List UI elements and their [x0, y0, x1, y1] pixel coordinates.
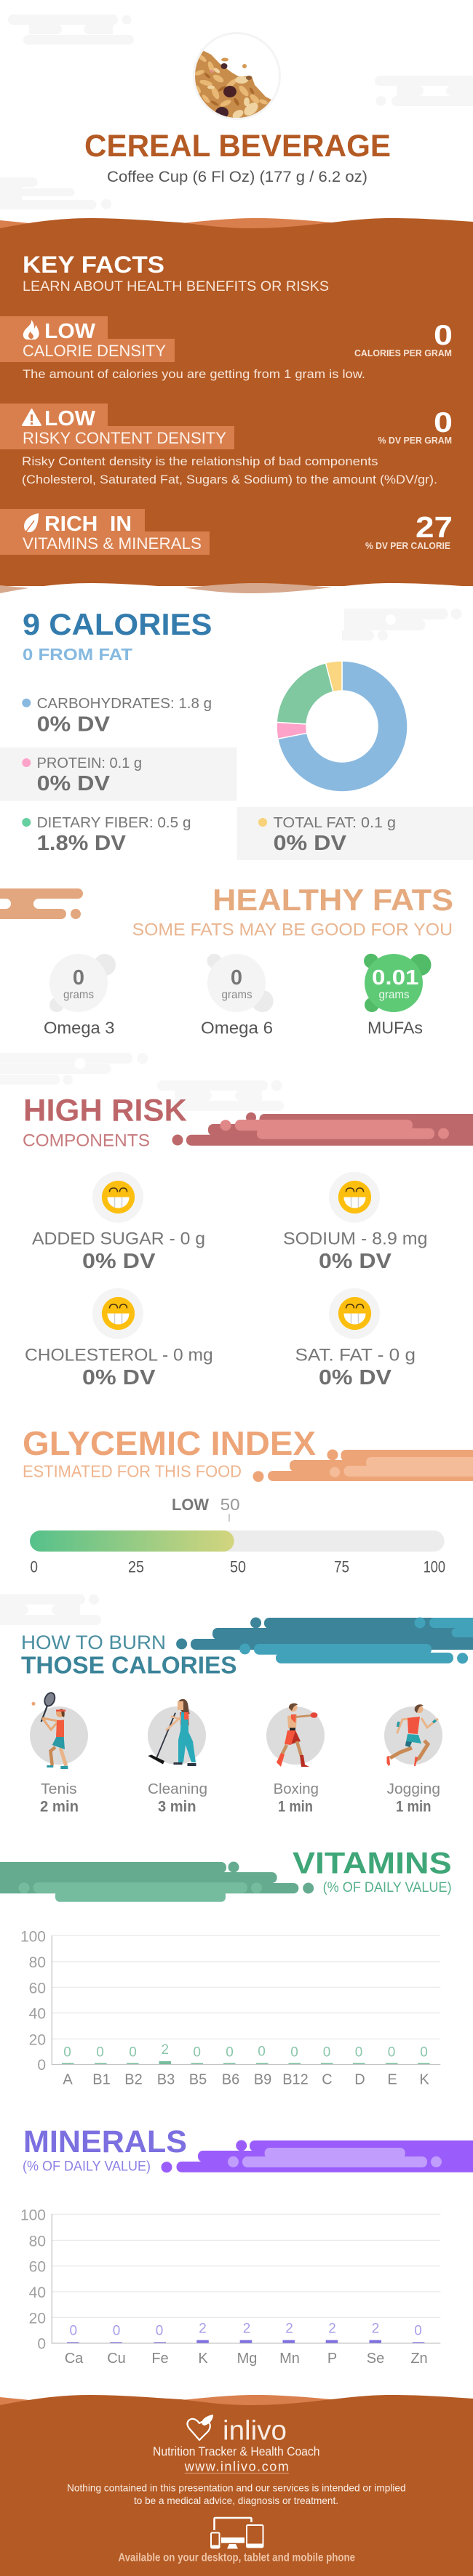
panel: minerals: [20, 2124, 473, 2367]
bar chart: minerals: Zn: [410, 2351, 428, 2367]
icon: runner: [387, 1704, 438, 1766]
metric: omega 3: [44, 954, 116, 1038]
gauge label: 50: [220, 1496, 240, 1514]
fact: calorie density: [0, 316, 453, 381]
fact: rich in vitamins and minerals: RICH IN: [44, 513, 132, 536]
food image ring: [194, 33, 279, 119]
website link: www.inlivo.com: [184, 2459, 289, 2473]
legend: total fat: TOTAL FAT: 0.1 g: [274, 815, 396, 831]
heading: minerals: MINERALS: [23, 2124, 187, 2159]
bar chart: minerals: 2: [243, 2321, 250, 2336]
icon: tennis player: [32, 1691, 68, 1769]
gauge label: [172, 1496, 240, 1522]
panel: glycemic index: [23, 1424, 473, 1576]
gauge scale: [31, 1558, 445, 1576]
banner shape: [176, 1617, 473, 1664]
bar chart: vitamins: 2: [162, 2042, 169, 2058]
gauge scale: 75: [334, 1558, 349, 1576]
icon: grinning face: [102, 1297, 135, 1330]
legend: carbohydrates: 0% DV: [37, 713, 111, 736]
banner dot: [71, 909, 81, 919]
bar chart: vitamins: 0: [258, 2044, 266, 2059]
subheading: (% OF DAILY VALUE): [23, 2159, 151, 2175]
legend: protein: 0% DV: [37, 772, 111, 795]
exercise: tennis: [30, 1691, 88, 1815]
bar chart: vitamins: A: [63, 2072, 73, 2088]
component: cholesterol: [25, 1288, 213, 1389]
fact: rich in vitamins and minerals: 27: [416, 510, 453, 544]
tagline: Nutrition Tracker & Health Coach: [153, 2444, 320, 2459]
bar chart: vitamins: B9: [254, 2072, 271, 2088]
fact: risky content density: 0: [434, 407, 453, 438]
component: sodium: 0% DV: [319, 1250, 392, 1273]
bar chart: vitamins: 20: [29, 2031, 46, 2048]
metric: mufas: grams: [378, 989, 409, 1001]
fact: rich in vitamins and minerals: % DV PER CALORIE: [365, 541, 450, 551]
component: added sugar: 0% DV: [82, 1250, 156, 1273]
exercise: tennis: Tenis: [41, 1781, 77, 1797]
icon: grinning face: [338, 1181, 371, 1213]
panel: key facts: [0, 218, 473, 603]
bar chart: minerals: K: [198, 2351, 208, 2367]
banner shape: [172, 1112, 473, 1146]
bar chart: vitamins: C: [322, 2072, 333, 2088]
panel: healthy fats: [0, 883, 453, 1038]
donut chart: [277, 661, 408, 792]
bar chart: vitamins: 80: [29, 1954, 46, 1971]
logo: inlivo: [188, 2415, 287, 2447]
bar chart: vitamins: 0: [193, 2045, 201, 2060]
panel: high risk: [23, 1094, 473, 1389]
legend: carbohydrates: CARBOHYDRATES: 1.8 g: [37, 696, 212, 712]
bar chart: vitamins: 0: [388, 2045, 395, 2060]
fact: rich in vitamins and minerals: VITAMINS & MINERALS: [23, 534, 202, 553]
bar chart: vitamins: E: [387, 2072, 397, 2088]
legend: total fat: [237, 807, 473, 860]
metric: mufas: [364, 954, 431, 1038]
gauge label: LOW: [172, 1496, 209, 1514]
fact: risky content density: [0, 404, 453, 486]
title: CEREAL BEVERAGE: [84, 129, 391, 164]
bar chart: vitamins: 0: [290, 2045, 298, 2060]
bar chart: minerals: 2: [285, 2321, 293, 2336]
fact: risky content density: % DV PER GRAM: [378, 436, 452, 446]
bar chart: vitamins: B12: [282, 2072, 309, 2088]
bar chart: minerals: [20, 2207, 440, 2367]
fact: calorie density: 0: [434, 320, 453, 351]
bar chart: minerals: 0: [113, 2324, 120, 2339]
banner shape: [0, 1861, 314, 1902]
bar chart: minerals: Fe: [151, 2351, 169, 2367]
gauge scale: 50: [230, 1558, 246, 1576]
subheading: LEARN ABOUT HEALTH BENEFITS OR RISKS: [23, 279, 329, 294]
heading: key facts: KEY FACTS: [23, 252, 164, 278]
bar chart: vitamins: B6: [222, 2072, 239, 2088]
bar chart: vitamins: 0: [37, 2057, 46, 2074]
bar chart: minerals: Se: [367, 2351, 384, 2367]
component: added sugar: [32, 1172, 205, 1273]
component: cholesterol: CHOLESTEROL - 0 mg: [25, 1346, 213, 1365]
component: sodium: SODIUM - 8.9 mg: [283, 1229, 428, 1249]
panel: calories breakdown: [0, 607, 473, 860]
bar chart: minerals: 0: [156, 2324, 163, 2339]
metric: omega 6: 0: [231, 966, 242, 990]
bar chart: minerals: 0: [37, 2335, 46, 2353]
metric: mufas: MUFAs: [367, 1019, 423, 1038]
metric: omega 6: [201, 954, 274, 1038]
panel: footer: [0, 2395, 473, 2576]
legend: total fat: 0% DV: [274, 832, 347, 855]
bar chart: minerals: 80: [29, 2233, 46, 2250]
legend: dietary fiber: DIETARY FIBER: 0.5 g: [37, 815, 191, 831]
exercise: boxing: Boxing: [274, 1781, 319, 1797]
bar chart: vitamins: B3: [157, 2072, 175, 2088]
heading: calories: 9 CALORIES: [23, 607, 212, 641]
exercise: cleaning: Cleaning: [148, 1781, 207, 1797]
bar chart: vitamins: B2: [124, 2072, 143, 2088]
metric: omega 6: Omega 6: [201, 1019, 273, 1038]
bar chart: vitamins: 0: [226, 2045, 234, 2060]
metric: omega 3: Omega 3: [44, 1019, 115, 1038]
bar chart: minerals: 60: [29, 2259, 46, 2276]
icon: grinning face: [102, 1181, 135, 1213]
heading: glycemic index: GLYCEMIC INDEX: [23, 1424, 316, 1462]
exercise: boxing: [266, 1704, 325, 1815]
exercise: boxing: 1 min: [278, 1799, 313, 1815]
bar chart: minerals: 0: [70, 2324, 77, 2339]
bar chart: minerals: 40: [29, 2284, 46, 2301]
icon: boxer: [277, 1704, 317, 1767]
component: saturated fat: 0% DV: [319, 1366, 392, 1389]
bar chart: minerals: 2: [199, 2321, 207, 2336]
icon: person sweeping: [148, 1699, 196, 1766]
bar chart: minerals: P: [327, 2351, 337, 2367]
panel: how to burn calories: [21, 1617, 473, 1815]
heading: high risk: HIGH RISK: [23, 1094, 187, 1128]
bar chart: vitamins: 0: [129, 2045, 137, 2060]
bar chart: vitamins: 0: [63, 2045, 71, 2060]
bar chart: vitamins: [20, 1928, 440, 2088]
availability note: Available on your desktop, tablet and mobile phone: [118, 2552, 355, 2564]
gauge bar: [30, 1530, 445, 1552]
bar chart: minerals: Mn: [279, 2351, 300, 2367]
heading: vitamins: VITAMINS: [293, 1846, 452, 1880]
fact: rich in vitamins and minerals: [0, 509, 453, 555]
banner shape: [162, 2140, 473, 2172]
bar chart: vitamins: B5: [189, 2072, 207, 2088]
fact: calorie density: CALORIE DENSITY: [23, 342, 166, 360]
icon: grinning face: [338, 1297, 371, 1330]
exercise: cleaning: [148, 1699, 207, 1815]
legend: protein: PROTEIN: 0.1 g: [37, 755, 142, 771]
metric: omega 3: 0: [73, 966, 84, 990]
food image: granola: [195, 51, 271, 118]
logo: inlivo: inlivo: [223, 2416, 287, 2447]
heading: healthy fats: HEALTHY FATS: [212, 883, 453, 917]
subheading: components: COMPONENTS: [23, 1131, 150, 1151]
disclaimer: to be a medical advice, diagnosis or treatment.: [134, 2495, 338, 2506]
heading: those calories: THOSE CALORIES: [21, 1652, 237, 1679]
legend: dietary fiber: 1.8% DV: [37, 832, 127, 855]
exercise: jogging: 1 min: [396, 1799, 431, 1815]
legend: carbohydrates: [22, 696, 212, 736]
bar chart: minerals: 20: [29, 2310, 46, 2327]
exercise: jogging: Jogging: [387, 1781, 440, 1797]
fact: risky content density: LOW: [44, 407, 96, 430]
bar chart: minerals: Mg: [237, 2351, 257, 2367]
legend: dietary fiber: [22, 815, 191, 855]
fact: calorie density: LOW: [44, 320, 96, 343]
bar chart: vitamins: B1: [92, 2072, 111, 2088]
component: added sugar: ADDED SUGAR - 0 g: [32, 1229, 205, 1249]
banner shape: [0, 888, 83, 919]
legend: protein: [0, 747, 237, 801]
fact: risky content density: (Cholesterol, Saturated Fat, Sugars & Sodium) to the amount (%DV/gr).: [22, 473, 437, 486]
metric: omega 6: grams: [221, 989, 252, 1001]
metric: omega 3: grams: [63, 989, 94, 1001]
bar chart: vitamins: 60: [29, 1980, 46, 1997]
fact: risky content density: RISKY CONTENT DENSITY: [23, 429, 226, 447]
serving subtitle: Coffee Cup (6 Fl Oz) (177 g / 6.2 oz): [107, 169, 367, 185]
bar chart: vitamins: K: [419, 2072, 429, 2088]
gauge scale: 100: [424, 1558, 445, 1576]
icon: warning triangle: [23, 409, 41, 425]
bar chart: vitamins: 0: [96, 2045, 104, 2060]
subheading: ESTIMATED FOR THIS FOOD: [23, 1462, 242, 1481]
bar chart: vitamins: D: [354, 2072, 365, 2088]
bar chart: minerals: 2: [372, 2321, 379, 2336]
disclaimer: Nothing contained in this presentation and our services is intended or implied: [67, 2482, 406, 2494]
icon: leaf: [24, 513, 39, 532]
subheading: SOME FATS MAY BE GOOD FOR YOU: [132, 920, 453, 940]
subheading: from fat: 0 FROM FAT: [23, 645, 132, 664]
exercise: cleaning: 3 min: [158, 1799, 196, 1815]
fact: calorie density: The amount of calories you are getting from 1 gram is low.: [23, 367, 365, 381]
bar chart: vitamins: 40: [29, 2006, 46, 2023]
exercise: jogging: [384, 1704, 442, 1815]
gauge scale: 0: [31, 1558, 38, 1576]
bar chart: minerals: 2: [328, 2321, 336, 2336]
metric: mufas: 0.01: [372, 966, 419, 990]
bar chart: minerals: 0: [414, 2324, 422, 2339]
icon: devices: [211, 2518, 263, 2549]
bar chart: vitamins: 0: [420, 2045, 428, 2060]
banner shape: [253, 1450, 473, 1482]
bar chart: vitamins: 0: [323, 2045, 330, 2060]
component: cholesterol: 0% DV: [82, 1366, 156, 1389]
bar chart: minerals: Cu: [107, 2351, 126, 2367]
heading: how to burn: HOW TO BURN: [21, 1632, 166, 1653]
component: sodium: [283, 1172, 428, 1273]
fact: risky content density: Risky Content density is the relationship of bad components: [22, 454, 378, 468]
bar chart: minerals: Ca: [65, 2351, 84, 2367]
bar chart: vitamins: 100: [20, 1928, 46, 1945]
panel: vitamins: [0, 1846, 452, 2088]
gauge scale: 25: [128, 1558, 144, 1576]
fact: calorie density: CALORIES PER GRAM: [354, 348, 452, 358]
icon: flame: [23, 320, 39, 340]
exercise: tennis: 2 min: [40, 1799, 79, 1815]
component: saturated fat: SAT. FAT - 0 g: [295, 1346, 416, 1365]
bar chart: vitamins: 0: [355, 2045, 362, 2060]
subheading: (% OF DAILY VALUE): [323, 1880, 452, 1895]
bar chart: minerals: 100: [20, 2207, 46, 2223]
component: saturated fat: [295, 1288, 416, 1389]
disclaimer: [67, 2482, 406, 2506]
